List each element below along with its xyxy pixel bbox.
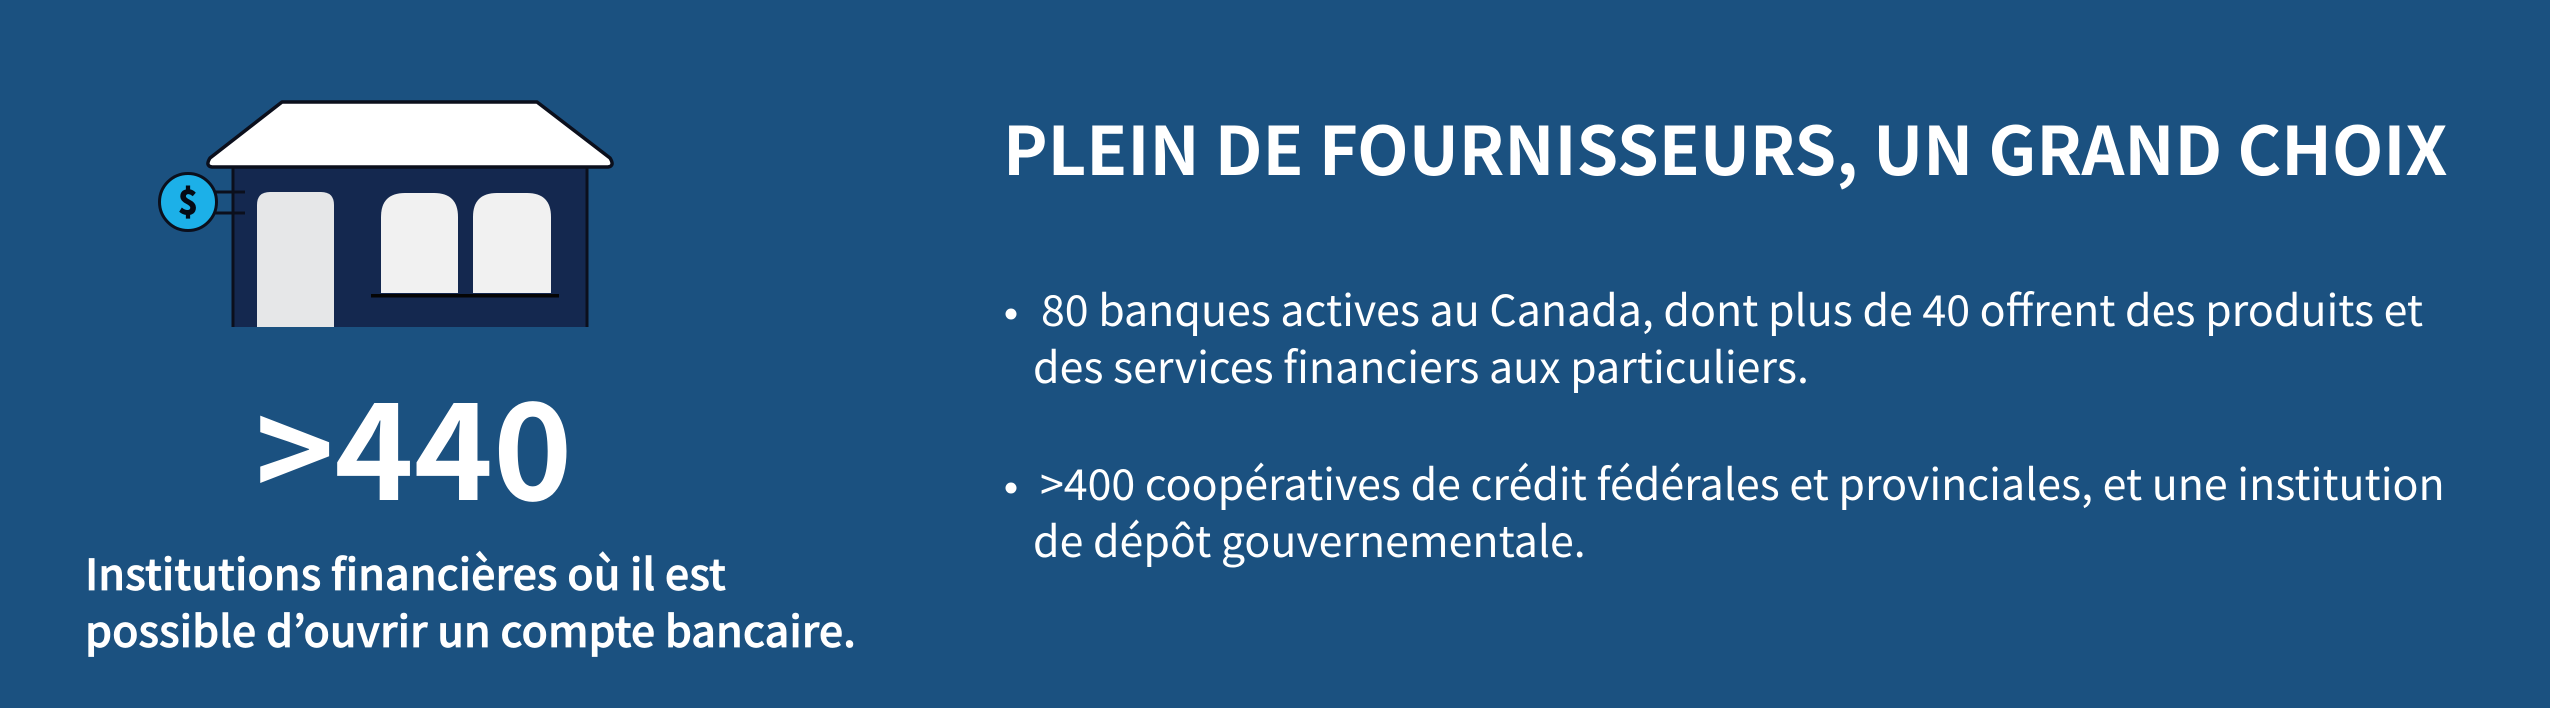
right window [473, 193, 551, 293]
window sill [371, 294, 559, 298]
icon: dollar coin [160, 174, 216, 230]
heading: PLEIN DE FOURNISSEURS, UN GRAND CHOIX [1003, 98, 2447, 195]
bullet 1: des services financiers aux particuliers. [1033, 334, 1809, 396]
big number: >440 [255, 344, 572, 539]
bullet 2 [1006, 451, 2445, 570]
bullet 1: 80 banques actives au Canada, dont plus de 40 offrent des produits et [1041, 277, 2423, 339]
bullet list [1006, 277, 2445, 570]
caption [85, 541, 856, 660]
bullet 2: de dépôt gouvernementale. [1033, 508, 1586, 570]
door [257, 192, 334, 327]
icon: bank building [160, 102, 612, 327]
bullet 2: >400 coopératives de crédit fédérales et provinciales, et une institution [1040, 451, 2445, 513]
building wall [233, 166, 587, 327]
icon: dollar coin: $ [178, 176, 198, 224]
roof [208, 102, 612, 167]
sign brackets [215, 192, 245, 213]
caption: Institutions financières où il est [85, 541, 726, 603]
bullet 1 [1006, 277, 2423, 396]
left window [381, 193, 458, 293]
caption: possible d’ouvrir un compte bancaire. [85, 598, 856, 660]
